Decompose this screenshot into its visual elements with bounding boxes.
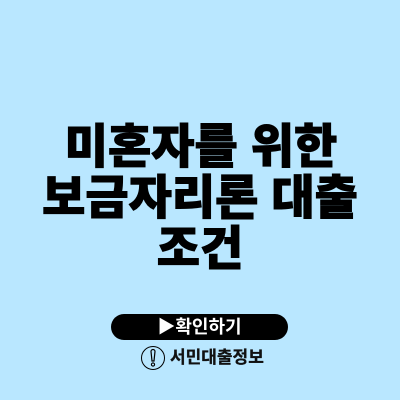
brand name: 서민대출정보 [170,348,264,367]
button: 확인하기 [111,314,288,340]
title: 보금자리론 대출 [42,171,358,224]
title [42,120,358,275]
icon: exclamation circle [141,346,165,370]
button: 확인하기: ▶확인하기 [157,317,242,337]
title: 미혼자를 위한 [65,120,337,173]
title: 조건 [157,222,243,275]
